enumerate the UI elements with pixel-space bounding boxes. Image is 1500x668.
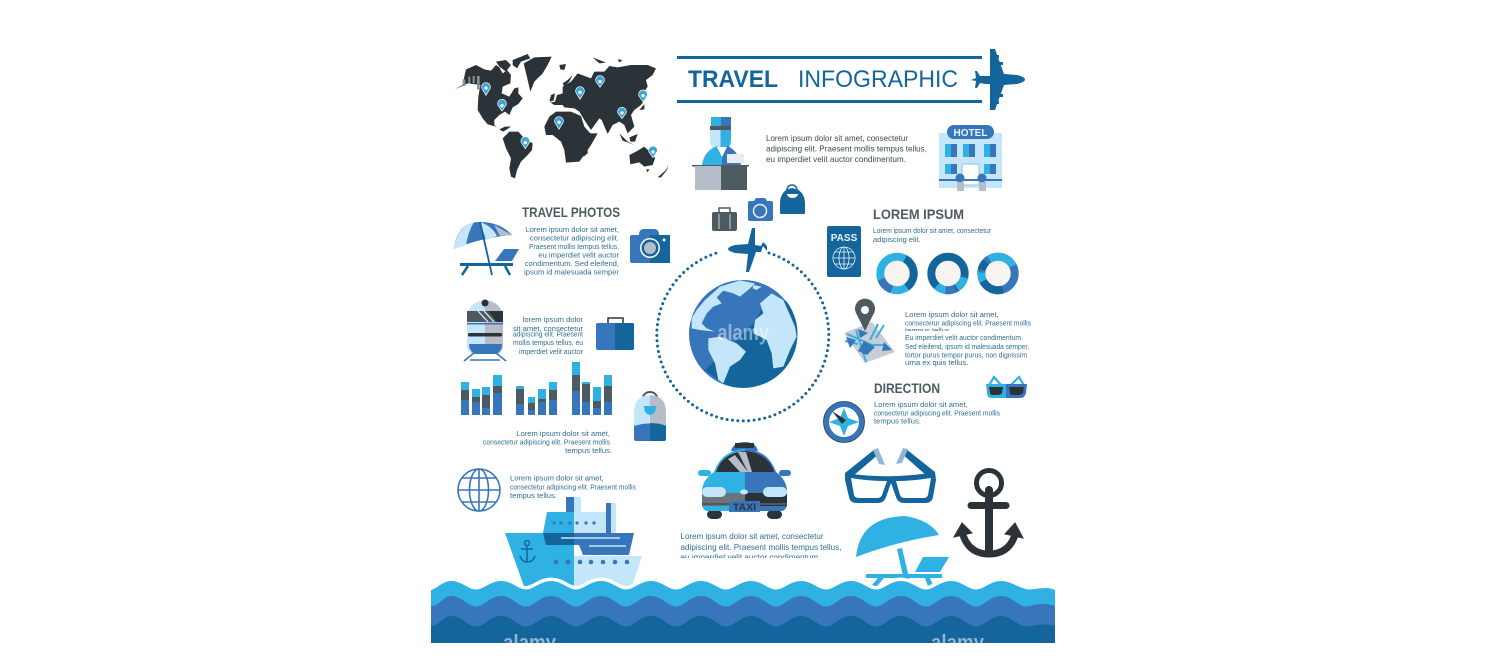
icon: orbit airplane — [728, 228, 767, 272]
icon: backpack — [634, 392, 666, 441]
icon: dark bag — [780, 185, 805, 214]
text block: receptionist: adipiscing elit. Praesent mollis tempus tellus, — [766, 144, 927, 154]
icon: hotel: HOTEL — [954, 128, 987, 139]
text block: bar charts: tempus tellus. — [565, 446, 612, 455]
text block: receptionist — [766, 133, 927, 164]
text block: travel photos: consectetur adipiscing elit. — [530, 234, 619, 242]
icon: passport — [827, 226, 861, 277]
icon: taxi: TAXI — [733, 502, 756, 514]
icon: large glasses — [845, 448, 936, 503]
text block: globe — [510, 474, 636, 500]
text block: bar charts: Lorem ipsum dolor sit amet, — [516, 429, 610, 438]
text block: train: lorem ipsum dolor — [523, 315, 583, 324]
globe with dotted orbit: alamy — [717, 320, 770, 345]
text block: taxi: adipiscing elit. Praesent mollis tempus tellus, — [680, 542, 842, 552]
text block: direction: consectetur adipiscing elit. Praesent mollis — [874, 408, 1000, 418]
icon: title airplane — [971, 49, 1025, 110]
text block: direction: Lorem ipsum dolor sit amet, — [874, 400, 968, 409]
icon: anchor — [954, 470, 1023, 554]
icon: passport: PASS — [831, 233, 858, 244]
icon: receptionist — [692, 117, 749, 190]
text block: map: Lorem ipsum dolor sit amet, — [905, 310, 999, 319]
text block: train: imperdiet velit auctor — [519, 347, 583, 356]
text block: map: tempus tellus. — [905, 326, 952, 335]
text block: map: consectetur adipiscing elit. Praesent mollis — [905, 318, 1031, 328]
pins — [482, 76, 657, 158]
heading: travel photos: TRAVEL PHOTOS — [522, 204, 620, 220]
heading: lorem ipsum: LOREM IPSUM — [873, 206, 964, 222]
text block: receptionist: Lorem ipsum dolor sit amet, consectetur — [766, 133, 908, 143]
text block: lorem ipsum: adipiscing elit. — [873, 235, 921, 244]
text block: map: Sed eleifend, ipsum id malesuada semper, — [905, 342, 1029, 351]
world map with pins — [454, 54, 668, 178]
watermark text — [503, 632, 985, 654]
text block: taxi: Lorem ipsum dolor sit amet, consectetur — [680, 531, 824, 541]
title banner: TRAVEL — [688, 66, 778, 93]
icon: grey suitcase — [712, 208, 737, 231]
covers watermark below the artwork — [431, 643, 1055, 668]
text block: bar charts — [483, 429, 612, 455]
text block: bar charts: consectetur adipiscing elit. Praesent mollis — [483, 438, 610, 446]
icon: beach umbrella and lounger — [454, 222, 519, 275]
icon: ship — [505, 497, 642, 592]
icon: wire globe — [458, 469, 500, 511]
text block: lorem ipsum — [873, 226, 991, 244]
icon: hotel — [939, 125, 1002, 191]
text block: travel photos — [524, 225, 619, 276]
text block: globe: tempus tellus. — [510, 491, 557, 500]
text block: globe: consectetur adipiscing elit. Praesent mollis — [510, 482, 636, 492]
watermark text: alamy — [503, 632, 557, 654]
text block: taxi: eu imperdiet velit auctor condimentum. — [680, 552, 820, 562]
text block: receptionist: eu imperdiet velit auctor condimentum. — [766, 154, 906, 164]
icon: big camera — [630, 229, 670, 263]
text block: lorem ipsum: Lorem ipsum dolor sit amet, consectetur — [873, 226, 991, 235]
text block: map: urna ex quis tellus. — [905, 358, 968, 367]
text block: travel photos: Lorem ipsum dolor sit amet, — [525, 225, 619, 234]
text block: train: adipiscing elit. Praesent — [513, 330, 584, 338]
icon: taxi — [698, 442, 791, 519]
text block: direction: tempus tellus. — [874, 416, 921, 426]
watermark text: alamy — [931, 632, 985, 654]
text block: travel photos: eu imperdiet velit auctor — [538, 250, 619, 260]
text block: globe: Lorem ipsum dolor sit amet, — [510, 474, 604, 482]
text block: train — [510, 315, 585, 356]
text block: map: Eu imperdiet velit auctor condimentum. — [905, 333, 1023, 342]
text block: travel photos: Praesent mollis tempus tellus, — [529, 242, 619, 251]
icon: train — [464, 300, 506, 361]
icon: small camera — [748, 198, 773, 221]
title banner — [677, 56, 982, 103]
text block: train: sit amet, consectetur — [513, 324, 583, 333]
text block: map: tortor purus tempor purus, non dignissim — [905, 350, 1027, 360]
icon: compass — [824, 402, 864, 442]
icon: map with pin — [844, 299, 895, 363]
icon: sunglasses small — [986, 377, 1027, 398]
text block: direction — [874, 400, 1000, 426]
text block: travel photos: ipsum id malesuada semper — [524, 268, 619, 276]
waves — [431, 581, 1055, 668]
icon: blue suitcase — [596, 318, 634, 350]
text block: map — [903, 310, 1031, 367]
icon: beach umbrella silhouette — [856, 516, 949, 592]
donut charts — [874, 251, 1021, 296]
bar charts — [461, 362, 612, 415]
text block: train: mollis tempus tellus, eu — [513, 338, 583, 347]
heading: direction: DIRECTION — [874, 380, 940, 396]
text block: taxi — [678, 531, 848, 564]
globe with dotted orbit — [657, 252, 829, 421]
title banner: INFOGRAPHIC — [798, 66, 958, 93]
text block: travel photos: condimentum. Sed eleifend, — [525, 259, 619, 268]
